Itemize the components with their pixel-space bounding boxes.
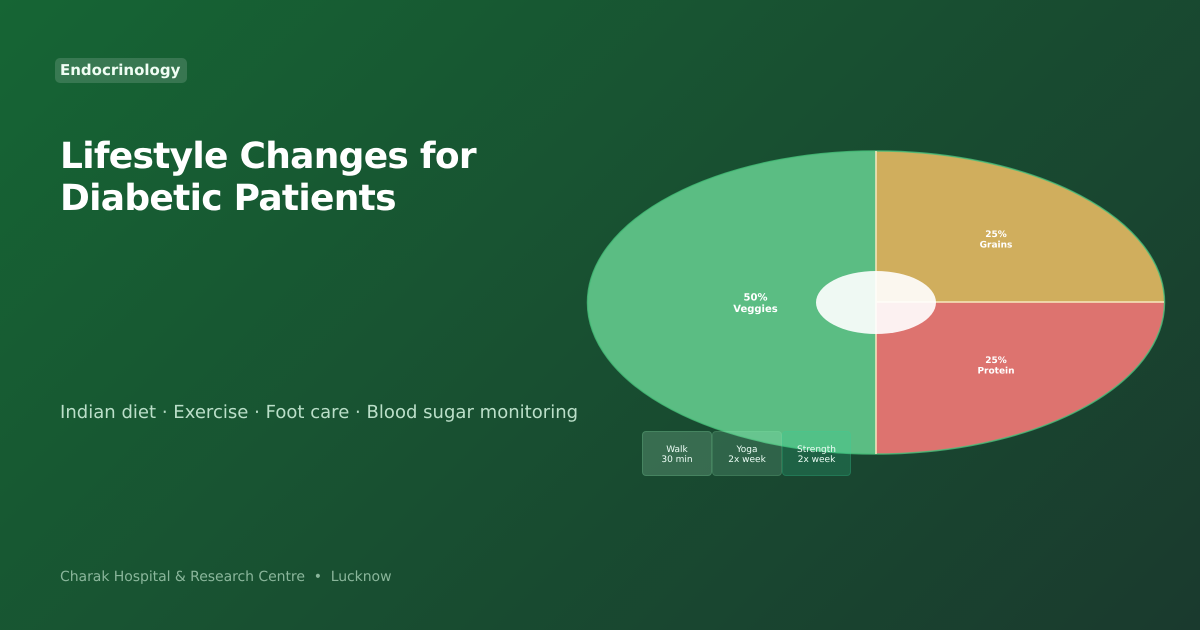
pie outline <box>588 151 1164 454</box>
footer: hospital and location: Charak Hospital & Research Centre • Lucknow <box>60 569 391 585</box>
chip: walk <box>642 431 712 476</box>
chip: walk: 30 min <box>661 454 693 464</box>
label: protein: 25% <box>985 356 1007 366</box>
center circle <box>816 271 936 334</box>
badge: Endocrinology: Endocrinology <box>60 60 180 78</box>
slice: veggies 50% <box>588 151 876 454</box>
title <box>60 136 477 219</box>
badge: Endocrinology <box>54 58 186 83</box>
title: Lifestyle Changes for <box>60 136 476 177</box>
label: veggies: 50% <box>744 292 767 304</box>
chip: strength: 2x week <box>798 454 835 464</box>
slice: grains 25% <box>876 151 1164 302</box>
chip: yoga: 2x week <box>728 454 766 464</box>
chip: walk: Walk <box>666 444 688 454</box>
slice dividers <box>876 151 1164 454</box>
label: grains: 25% <box>985 230 1007 240</box>
label: protein: Protein <box>977 366 1015 376</box>
subtitle: Indian diet · Exercise · Foot care · Blood sugar monitoring <box>60 402 578 423</box>
chip: yoga: Yoga <box>736 444 758 454</box>
chip: strength <box>782 431 851 476</box>
chip: strength: Strength <box>797 444 836 454</box>
chip: yoga <box>712 431 782 476</box>
label: grains: Grains <box>980 240 1012 250</box>
slice: protein 25% <box>876 302 1164 454</box>
title: Diabetic Patients <box>60 178 396 219</box>
chart: plate pie chart <box>586 150 1166 455</box>
label: veggies: Veggies <box>733 304 778 315</box>
